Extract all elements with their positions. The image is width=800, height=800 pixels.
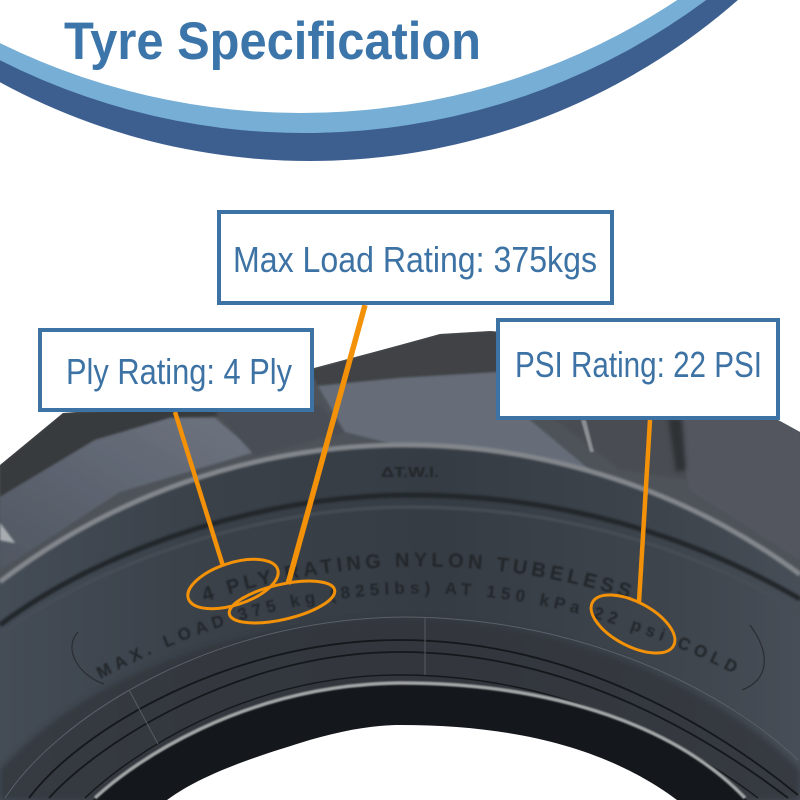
callout: psi rating (498, 320, 778, 418)
header arc (0, 0, 738, 161)
leader: psi (639, 420, 650, 602)
moulded label outline (72, 625, 764, 690)
tyre hole (167, 725, 677, 800)
lower lettering: MAX. LOAD 375 kg (825lbs) AT 150 kPa 22 psi COLD (96, 581, 737, 678)
callout: max load rating: Max Load Rating: 375kgs (233, 239, 597, 280)
leader: ply (175, 412, 223, 566)
callout: max load rating (219, 212, 612, 303)
highlight ovals (182, 550, 684, 665)
sidewall (0, 445, 800, 800)
rim rings (5, 617, 798, 798)
upper lettering: 4 PLY RATING NYLON TUBELESS (203, 552, 631, 600)
leader lines (175, 305, 650, 602)
callout: ply rating: Ply Rating: 4 Ply (66, 351, 292, 392)
callout: ply rating (40, 330, 312, 410)
bead area shading (0, 618, 800, 800)
oval: 4 ply (182, 550, 284, 618)
tread groove (668, 418, 686, 472)
moulding seams (129, 617, 425, 744)
tread lugs (0, 331, 800, 570)
rim opening (93, 683, 747, 800)
shoulder highlight (0, 445, 800, 582)
rim highlight (95, 683, 745, 798)
tread highlight (581, 420, 594, 452)
tread base (0, 331, 800, 582)
T.W.I. mark: ΔT.W.I. (381, 464, 439, 481)
title: Tyre Specification (64, 12, 481, 71)
sidewall lettering (96, 464, 737, 678)
tyre photo (0, 331, 800, 800)
oval: 375 kg (225, 573, 339, 631)
sidewall grooves (0, 495, 800, 635)
leader: load (288, 305, 365, 584)
oval: 22 psi (582, 583, 684, 665)
